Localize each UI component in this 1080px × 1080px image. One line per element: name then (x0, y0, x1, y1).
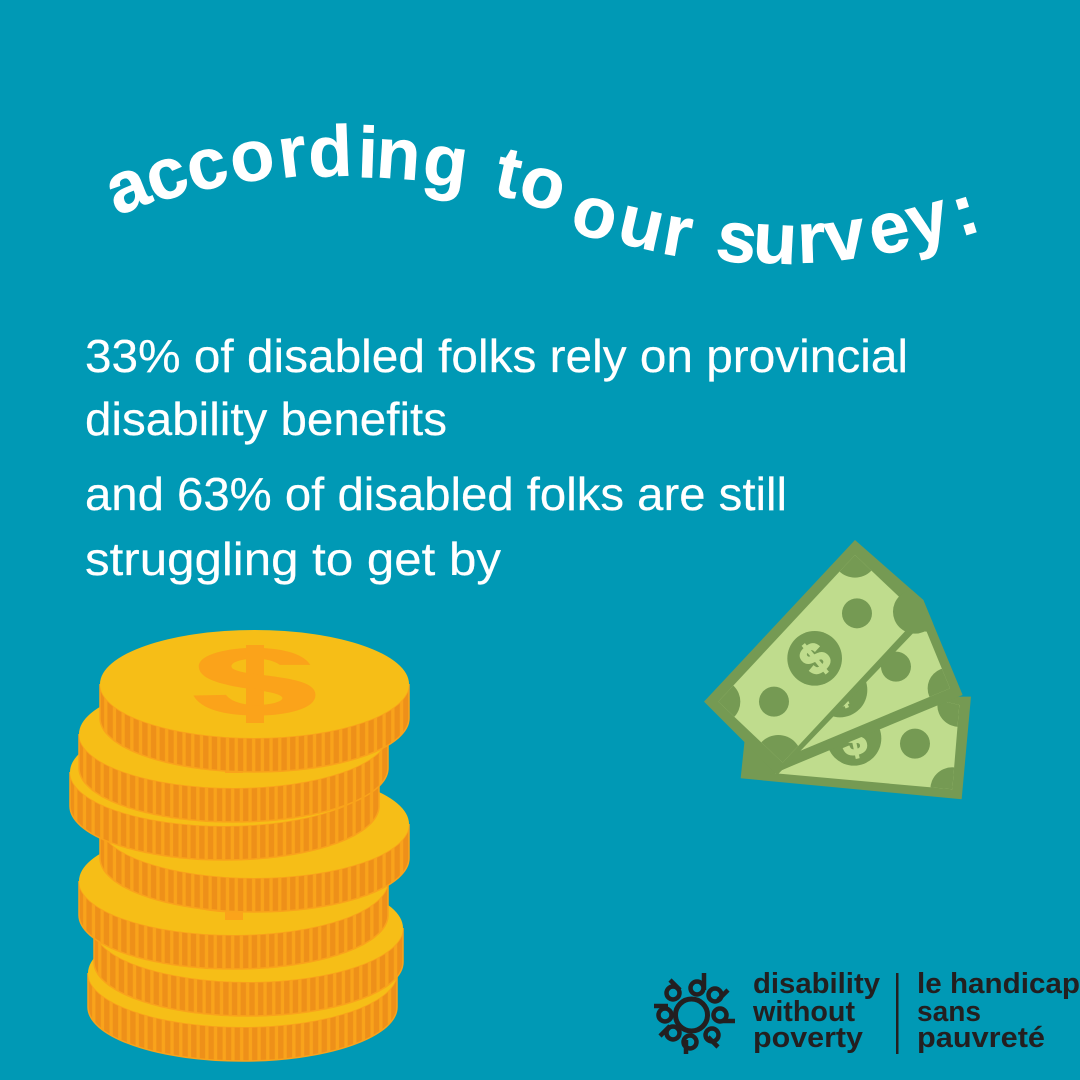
logo wordmark: English: poverty (753, 1022, 863, 1054)
logo: disability without poverty (654, 968, 1080, 1054)
title: according to our survey (93, 111, 988, 280)
logo wordmark: French: pauvreté (917, 1022, 1045, 1054)
banknote: back: $ (837, 715, 871, 767)
banknote: middle (782, 600, 963, 770)
banknote: back (740, 696, 971, 800)
logo wordmark: French: sans (917, 996, 981, 1028)
logo wordmark: French (917, 968, 1080, 1054)
title: according to our survey: our survey: (564, 169, 988, 280)
title: according to our survey: according to (93, 111, 575, 231)
body text: survey statistics: disability benefits (85, 393, 447, 445)
icon: fan of green banknotes (704, 540, 971, 800)
logo wordmark: French: le handicap (917, 968, 1080, 1000)
body text: survey statistics: and 63% of disabled folks are still (85, 468, 787, 520)
logo wordmark: English: without (752, 996, 855, 1028)
icon: stack of gold coins (70, 630, 409, 1061)
body text: survey statistics (85, 330, 908, 585)
banknote: front (704, 540, 934, 774)
body text: survey statistics: struggling to get by (85, 533, 501, 585)
banknote: front: $ (791, 633, 840, 685)
logo wordmark: English (752, 968, 880, 1054)
body text: survey statistics: 33% of disabled folks rely on provincial (85, 330, 908, 382)
banknote: middle: 4 (832, 689, 853, 715)
logo icon: sun of linked letters (654, 973, 735, 1054)
logo wordmark: English: disability (753, 968, 880, 1000)
logo divider (896, 973, 898, 1054)
